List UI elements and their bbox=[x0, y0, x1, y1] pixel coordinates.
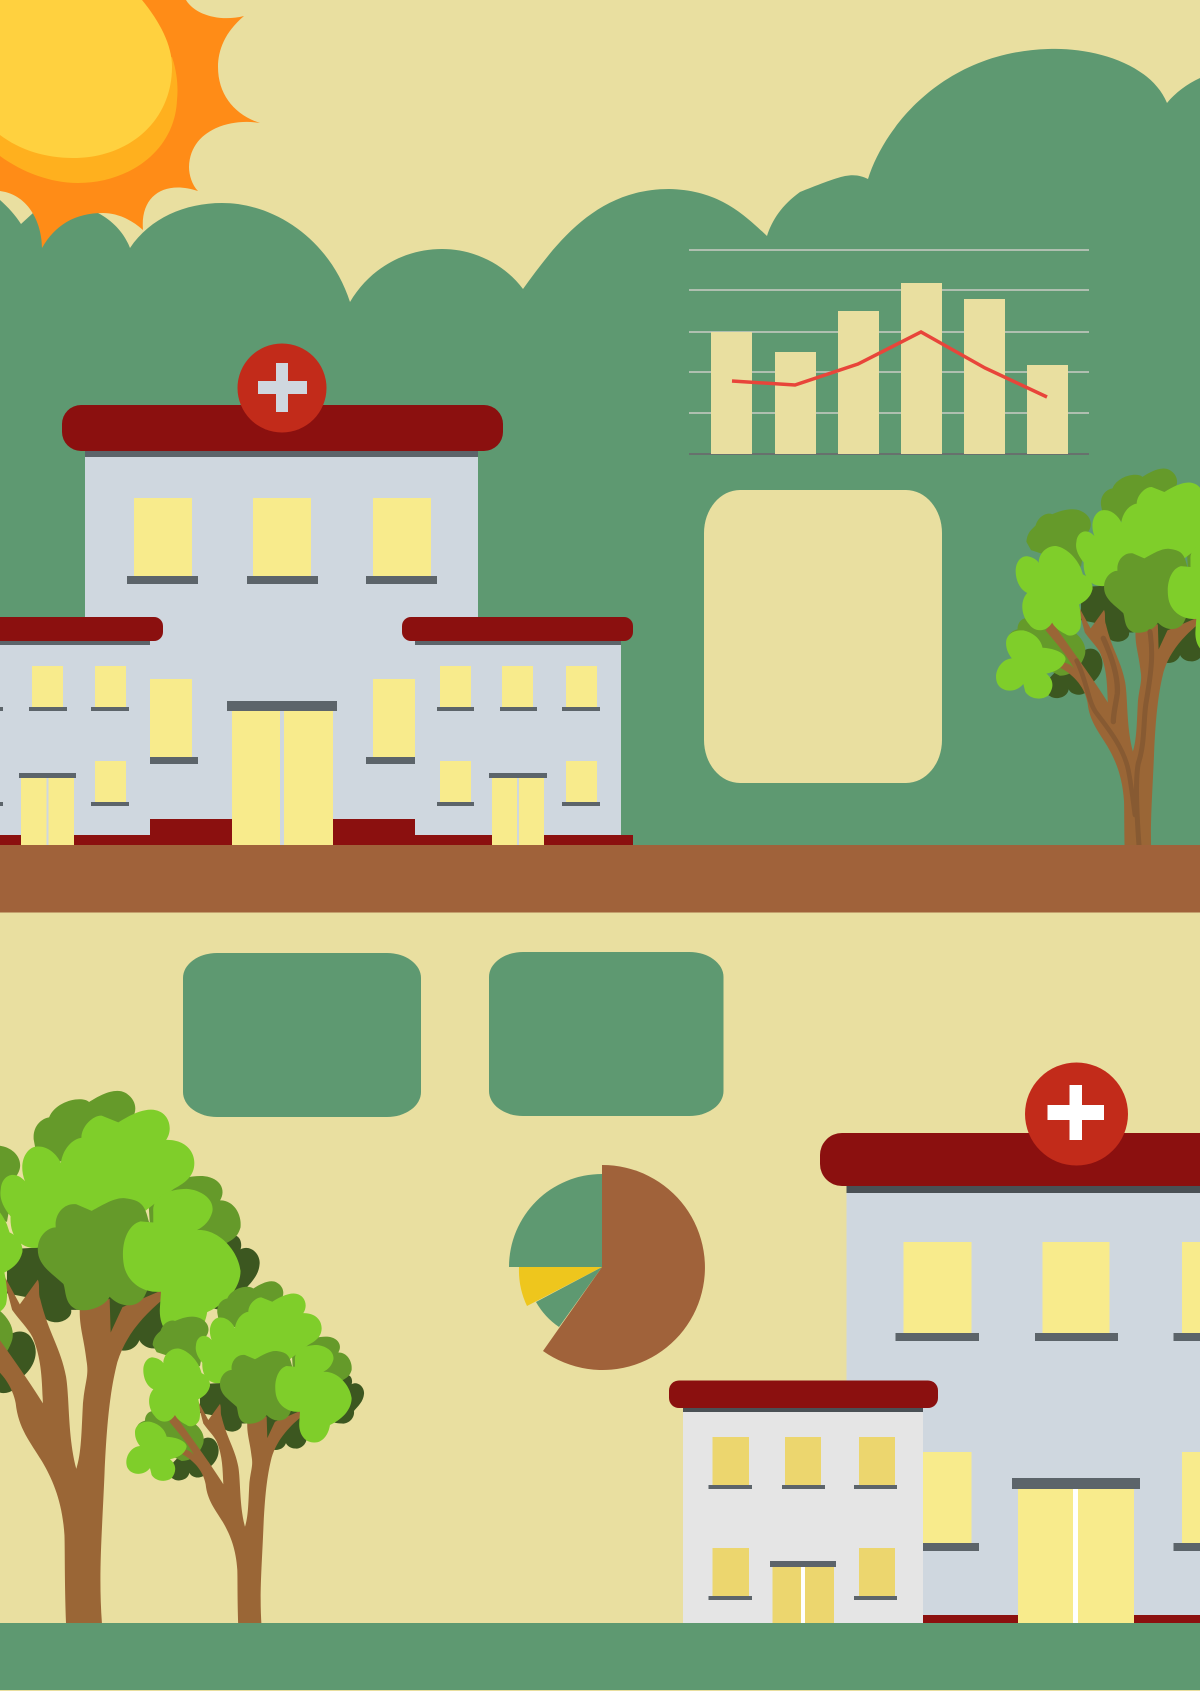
windows bbox=[896, 1242, 1200, 1551]
main entrance bbox=[150, 701, 415, 845]
sun rays bbox=[0, 0, 260, 248]
base strip bbox=[846, 1615, 1200, 1623]
pie chart bbox=[509, 1165, 705, 1370]
small annex bbox=[669, 1380, 938, 1623]
sun disc bbox=[0, 0, 172, 158]
hospital: bottom bbox=[669, 1062, 1200, 1623]
roof band bbox=[846, 1186, 1200, 1193]
red cross badge bbox=[1025, 1062, 1128, 1166]
roof band bbox=[85, 451, 478, 457]
pie slice: brown bbox=[543, 1165, 705, 1370]
sun shade bbox=[0, 57, 177, 183]
left wing bbox=[0, 617, 163, 845]
main block bbox=[85, 451, 478, 845]
upper windows bbox=[127, 498, 437, 764]
right wing bbox=[402, 617, 633, 845]
hospital: top bbox=[0, 344, 633, 845]
red cross badge bbox=[238, 344, 326, 432]
tree: top right bbox=[996, 468, 1200, 867]
ground: brown bbox=[0, 845, 1200, 912]
trend line bbox=[732, 332, 1047, 397]
ground: green bbox=[0, 1623, 1200, 1690]
tree: small lower left bbox=[126, 1281, 364, 1627]
chart: bars and line bbox=[689, 250, 1089, 454]
bars bbox=[711, 283, 1068, 454]
blank panel: lower left card bbox=[183, 953, 421, 1117]
roof bbox=[820, 1133, 1200, 1186]
pie slice: green small bbox=[536, 1267, 602, 1327]
blank panel: lower middle card bbox=[489, 952, 724, 1116]
main block bbox=[846, 1186, 1200, 1623]
pie slice: green quarter bbox=[509, 1174, 602, 1267]
tree: large lower left bbox=[0, 1091, 260, 1623]
green hills backdrop bbox=[0, 49, 1200, 850]
blank panel: right card bbox=[704, 490, 942, 783]
roof bbox=[62, 405, 503, 451]
sun bbox=[0, 0, 260, 248]
pie slice: yellow bbox=[519, 1267, 602, 1306]
main entrance bbox=[1012, 1478, 1140, 1623]
